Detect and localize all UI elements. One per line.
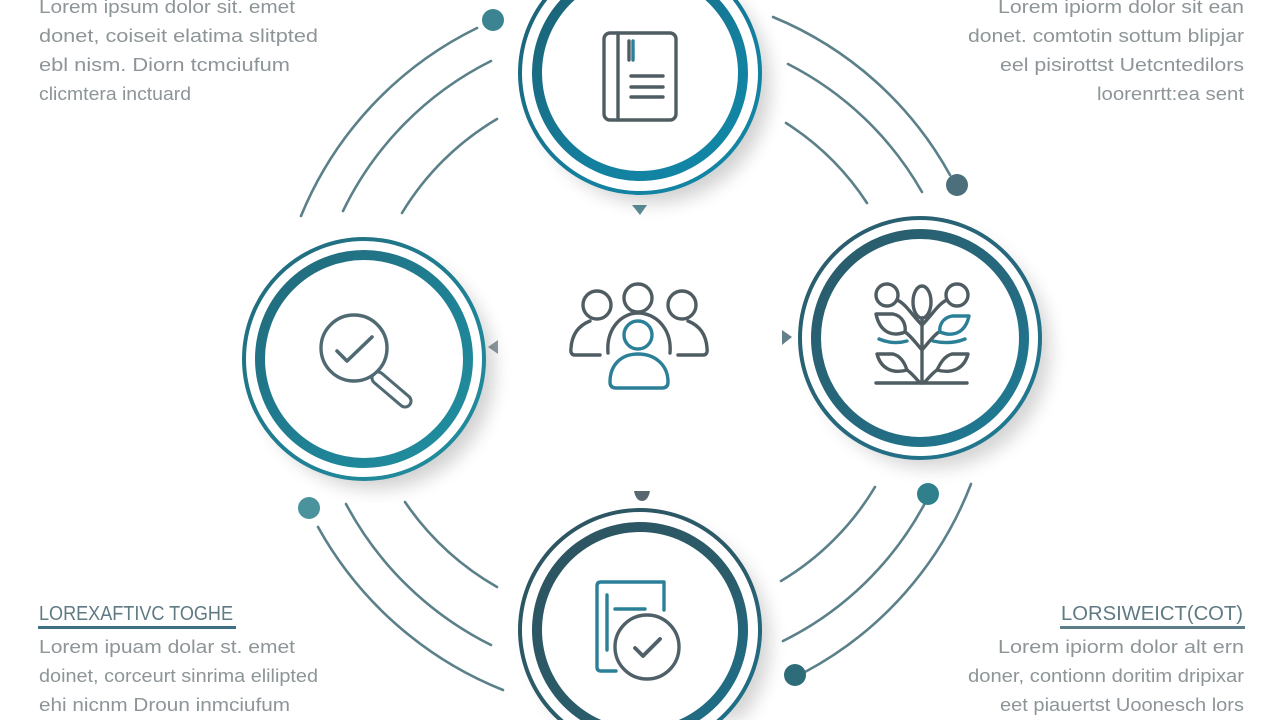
text block: bottom left: doinet, corceurt sinrima elilipted [39, 666, 318, 686]
text block: top left: donet, coiseit elatima slitpted [39, 26, 318, 46]
dot: bottom right upper [917, 483, 939, 505]
pointer: left [488, 340, 498, 354]
text block: bottom right: eet piauertst Uoonesch lors [1000, 695, 1244, 715]
node: left (magnifier) [244, 239, 494, 489]
text block: bottom right: doner, contionn doritim dripixar [968, 666, 1244, 686]
text block: bottom left: ehi nicnm Droun inmciufum [39, 695, 290, 715]
node: top (book) [518, 0, 770, 203]
text block: bottom left: Lorem ipuam dolar st. emet [39, 637, 295, 657]
dot: top left [482, 9, 504, 31]
text block: top left: clicmtera inctuard [39, 84, 191, 104]
dot: bottom right lower [784, 664, 806, 686]
connecting arcs: top right [773, 17, 950, 203]
icon: document check [597, 582, 679, 679]
text block: top right: loorenrtt:ea sent [1097, 84, 1244, 104]
icon: book [604, 33, 676, 120]
node: bottom (document check) [518, 508, 770, 720]
pointer: right [782, 330, 792, 345]
text block: top right [968, 0, 1244, 104]
dot: bottom left [298, 497, 320, 519]
text block: top left [39, 0, 318, 104]
connecting arcs: bottom right [781, 484, 971, 672]
text block: top right: donet. comtotin sottum blipjar [968, 26, 1244, 46]
icon: magnifier [321, 315, 405, 401]
heading: bottom right: LORSIWEICT(COT) [1061, 603, 1243, 625]
icon: plant [876, 284, 969, 383]
text block: bottom right [968, 603, 1245, 715]
text block: top right: eel pisirottst Uetcntedilors [1000, 55, 1244, 75]
connecting arcs: bottom left [318, 502, 503, 690]
pointer: bottom [634, 491, 650, 501]
text block: bottom left [38, 603, 318, 715]
pointer: top [632, 205, 647, 215]
connecting arcs: top left [301, 28, 497, 216]
text block: bottom right: Lorem ipiorm dolor alt ern [998, 637, 1244, 657]
text block: top left: ebl nism. Diorn tcmciufum [39, 55, 290, 75]
node: right (plant) [800, 218, 1050, 468]
dot: top right [946, 174, 968, 196]
icon: people group (center) [571, 284, 707, 388]
heading: bottom left: LOREXAFTIVC TOGHE [39, 603, 233, 625]
